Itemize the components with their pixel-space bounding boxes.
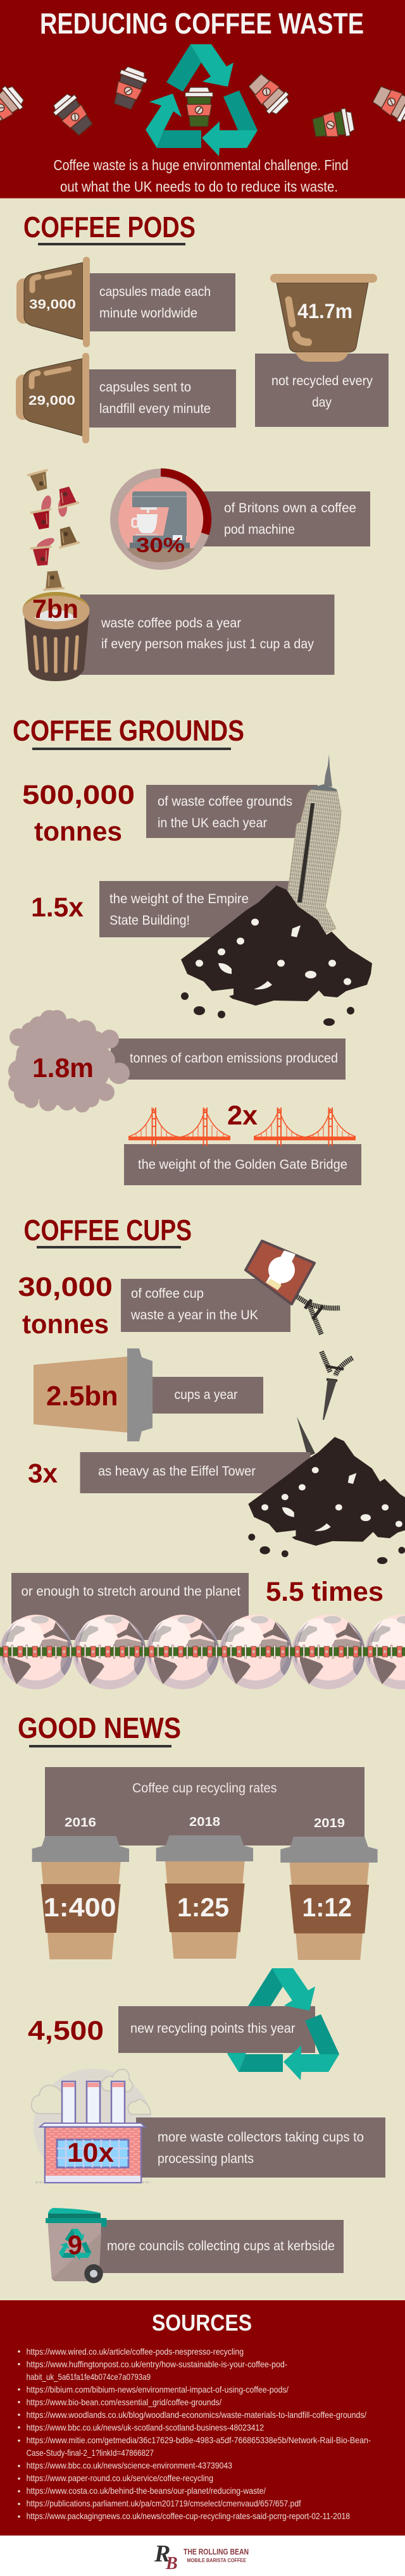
icon: bridge two bbox=[254, 1107, 356, 1146]
panel: 39,000 capsules made bbox=[16, 257, 235, 347]
icon: bridge one bbox=[128, 1107, 230, 1146]
list: source urls bbox=[18, 2346, 371, 2521]
panel: 1.8m carbon: 1.8m bbox=[32, 1053, 94, 1083]
panel: 39,000 capsules made: minute worldwide bbox=[99, 306, 197, 321]
icon: recycling wheelie bin bbox=[46, 2208, 106, 2283]
list: source urls: https://bibium.com/bibium-news/environmental-impact-of-using-coffee-pods/ bbox=[27, 2384, 289, 2394]
panel: 1.8m carbon bbox=[8, 1010, 346, 1112]
panel: 30,000 tonnes: 30,000 bbox=[18, 1272, 113, 1302]
cup: 2016: 1:400 bbox=[44, 1892, 116, 1922]
panel: 1.5x Empire State: 1.5x bbox=[31, 892, 84, 923]
panel: 29,000 capsules to landfill: capsules sent to bbox=[99, 380, 191, 395]
panel: 2x Golden Gate Bridge: the weight of the Golden Gate Bridge bbox=[138, 1157, 347, 1172]
list: source urls: https://www.paper-round.co.uk/service/coffee-recycling bbox=[27, 2473, 213, 2483]
icon: factory bbox=[35, 2081, 150, 2183]
panel: 41.7m not recycled: 41.7m bbox=[297, 300, 352, 323]
panel: 2x Golden Gate Bridge bbox=[124, 1100, 361, 1185]
panel: 5.5 times around the planet: 5.5 times bbox=[266, 1577, 383, 1607]
cup: 2016 bbox=[32, 1816, 129, 1959]
panel: 41.7m not recycled: day bbox=[312, 395, 332, 410]
panel: 39,000 capsules made: capsules made each bbox=[99, 285, 211, 299]
panel: 30,000 tonnes: tonnes bbox=[22, 1309, 109, 1340]
panel: 10x more waste collectors bbox=[32, 2069, 385, 2184]
icon: upright coffee pod bbox=[270, 274, 377, 362]
heading: coffee cups: COFFEE CUPS bbox=[24, 1214, 192, 1247]
panel: 3x Eiffel Tower: as heavy as the Eiffel Tower bbox=[98, 1464, 256, 1479]
list: source urls: https://www.huffingtonpost.co.uk/entry/how-sustainable-is-your-coffee-pod- bbox=[27, 2359, 287, 2369]
logo mark: RB bbox=[154, 2541, 178, 2573]
panel: 30,000 tonnes: of coffee cup bbox=[131, 1286, 204, 1301]
panel: 500,000 tonnes: of waste coffee grounds bbox=[158, 794, 292, 809]
icon: recycling symbol bbox=[227, 1968, 339, 2080]
cup: 2018: 1:25 bbox=[177, 1892, 229, 1922]
icon: clouds behind factory bbox=[32, 2069, 153, 2184]
list: source urls: https://www.mitie.com/getmedia/36c17629-bd8e-4983-a5df-766865338e5b/Network-Rail-Bio-Bean- bbox=[27, 2435, 371, 2445]
panel: 1.8m carbon: tonnes of carbon emissions produced bbox=[130, 1051, 338, 1066]
panel: 30% own a pod machine bbox=[110, 469, 370, 570]
icon: centre coffee cup bbox=[185, 87, 213, 126]
panel: 1.5x Empire State: State Building! bbox=[109, 913, 190, 928]
panel: 7bn waste pods bbox=[23, 592, 334, 681]
panel: 7bn waste pods: waste coffee pods a year bbox=[101, 616, 241, 631]
icon: coffee pod bbox=[16, 257, 90, 347]
list: source urls: https://www.bbc.co.uk/news/science-environment-43739043 bbox=[27, 2460, 232, 2470]
icon: row of globes bbox=[0, 1615, 405, 1689]
icon: smoke cloud bbox=[8, 1010, 130, 1112]
panel: 30% own a pod machine: of Britons own a coffee bbox=[224, 501, 356, 515]
list: source urls: https://www.bio-bean.com/essential_grid/coffee-grounds/ bbox=[27, 2397, 221, 2407]
panel: 1.5x Empire State bbox=[31, 881, 290, 937]
icon: coffee machine bbox=[130, 491, 190, 548]
panel: 5.5 times around the planet: or enough to stretch around the planet bbox=[22, 1584, 240, 1599]
icon: coffee cup sleeve bbox=[246, 1241, 315, 1304]
logo mark: RB: B bbox=[165, 2554, 178, 2573]
panel: coffee cup recycling rates: Coffee cup recycling rates bbox=[132, 1781, 277, 1796]
panel: 2.5bn cups bbox=[34, 1348, 263, 1441]
chart: 30 percent ring bbox=[110, 469, 211, 570]
icon: coffee grounds heap bbox=[181, 885, 372, 1026]
panel: 10x more waste collectors: processing plants bbox=[158, 2152, 254, 2166]
panel: 29,000 capsules to landfill: landfill every minute bbox=[99, 402, 211, 416]
cup: 2019: 2019 bbox=[314, 1816, 345, 1830]
panel: 9 more councils: 9 bbox=[68, 2230, 82, 2260]
panel: sources bbox=[0, 2300, 405, 2536]
list: source urls: https://www.wired.co.uk/article/coffee-pods-nespresso-recycling bbox=[27, 2346, 244, 2357]
panel: 2.5bn cups: cups a year bbox=[175, 1388, 238, 1402]
panel: 10x more waste collectors: more waste collectors taking cups to bbox=[158, 2130, 364, 2145]
panel: 41.7m not recycled bbox=[255, 274, 389, 427]
list: source urls: Case-Study-final-2_1?linkId=47866827 bbox=[27, 2448, 154, 2458]
panel: 4,500 recycling points: new recycling points this year bbox=[130, 2021, 296, 2036]
cup: 2018 bbox=[156, 1815, 253, 1959]
panel: 7bn waste pods: if every person makes just 1 cup a day bbox=[101, 637, 314, 651]
panel: 2x Golden Gate Bridge: 2x bbox=[227, 1100, 258, 1131]
panel: 9 more councils bbox=[46, 2208, 344, 2283]
panel: 30,000 tonnes: waste a year in the UK bbox=[130, 1308, 258, 1322]
footer: logo bbox=[0, 2536, 405, 2576]
list: source urls: https://www.costa.co.uk/behind-the-beans/our-planet/reducing-waste/ bbox=[27, 2486, 266, 2496]
intro text: Coffee waste is a huge environmental challenge. Find bbox=[53, 157, 348, 173]
icon: coffee pod bbox=[16, 353, 89, 443]
list: source urls: https://www.woodlands.co.uk/blog/woodland-economics/waste-materials-to-landfill-coffee-grounds/ bbox=[27, 2410, 366, 2420]
panel: 29,000 capsules to landfill: 29,000 bbox=[28, 393, 75, 408]
panel: 4,500 recycling points bbox=[28, 1968, 339, 2080]
cup: 2018: 2018 bbox=[189, 1815, 220, 1829]
icon: waste bin bbox=[23, 592, 90, 681]
icon: cup on its side bbox=[34, 1348, 153, 1441]
heading: coffee pods: COFFEE PODS bbox=[23, 211, 196, 243]
panel: 1.5x Empire State: the weight of the Empire bbox=[109, 892, 249, 906]
panel: 3x Eiffel Tower: 3x bbox=[28, 1458, 58, 1489]
panel: 41.7m not recycled: not recycled every bbox=[271, 374, 373, 388]
panel: 9 more councils: more councils collecting cups at kerbside bbox=[107, 2239, 335, 2253]
intro text: out what the UK needs to do to reduce its waste. bbox=[60, 178, 338, 195]
panel: 500,000 tonnes bbox=[22, 780, 318, 847]
heading: coffee grounds: COFFEE GROUNDS bbox=[13, 714, 244, 747]
icon: Eiffel Tower falling bbox=[297, 1297, 352, 1457]
footer: logo: THE ROLLING BEAN bbox=[184, 2548, 249, 2556]
panel: 500,000 tonnes: tonnes bbox=[34, 817, 122, 847]
chart: 30 percent ring: 30% bbox=[136, 534, 185, 557]
panel: 500,000 tonnes: in the UK each year bbox=[158, 816, 267, 830]
panel: 2.5bn cups: 2.5bn bbox=[46, 1381, 118, 1412]
panel: 500,000 tonnes: 500,000 bbox=[22, 780, 135, 810]
icon: falling coffee pods bbox=[27, 469, 80, 591]
list: source urls: habit_uk_5a61fa1fe4b074ce7a0793a9 bbox=[27, 2372, 151, 2382]
panel: 39,000 capsules made: 39,000 bbox=[29, 297, 76, 312]
panel: 3x Eiffel Tower bbox=[28, 1452, 310, 1493]
icon: belt of coffee cups bbox=[0, 1644, 405, 1660]
list: source urls: https://publications.parliament.uk/pa/cm201719/cmselect/cmenvaud/657/657.pdf bbox=[27, 2498, 301, 2508]
logo mark: RB: R bbox=[154, 2541, 170, 2567]
icon: second coffee grounds heap bbox=[248, 1437, 405, 1564]
panel: 30% own a pod machine: pod machine bbox=[224, 522, 295, 537]
panel: 7bn waste pods: 7bn bbox=[32, 594, 78, 624]
panel: 4,500 recycling points: 4,500 bbox=[28, 2016, 104, 2046]
icon: floating coffee cups bbox=[0, 65, 405, 142]
footer: logo: MOBILE BARISTA COFFEE bbox=[187, 2557, 246, 2563]
cup: 2019 bbox=[280, 1816, 378, 1960]
list: source urls: https://www.packagingnews.co.uk/news/coffee-cup-recycling-rates-said-pcrrg-report-02-11-2018 bbox=[27, 2511, 350, 2521]
icon: recycling symbol bbox=[146, 44, 258, 156]
panel: 29,000 capsules to landfill bbox=[16, 353, 236, 443]
panel: header bbox=[0, 0, 405, 199]
heading: sources: SOURCES bbox=[152, 2310, 252, 2336]
panel: 5.5 times around the planet bbox=[0, 1573, 405, 1689]
list: source urls: https://www.bbc.co.uk/news/uk-scotland-scotland-business-48023412 bbox=[27, 2422, 264, 2432]
heading: good news: GOOD NEWS bbox=[18, 1711, 181, 1744]
panel: 10x more waste collectors: 10x bbox=[67, 2138, 114, 2168]
icon: Empire State Building bbox=[278, 754, 341, 936]
cup: 2016: 2016 bbox=[65, 1816, 96, 1830]
panel: coffee cup recycling rates bbox=[32, 1767, 378, 1960]
panel: 30,000 tonnes bbox=[18, 1272, 290, 1340]
intro text bbox=[53, 157, 348, 195]
cup: 2019: 1:12 bbox=[302, 1892, 352, 1922]
